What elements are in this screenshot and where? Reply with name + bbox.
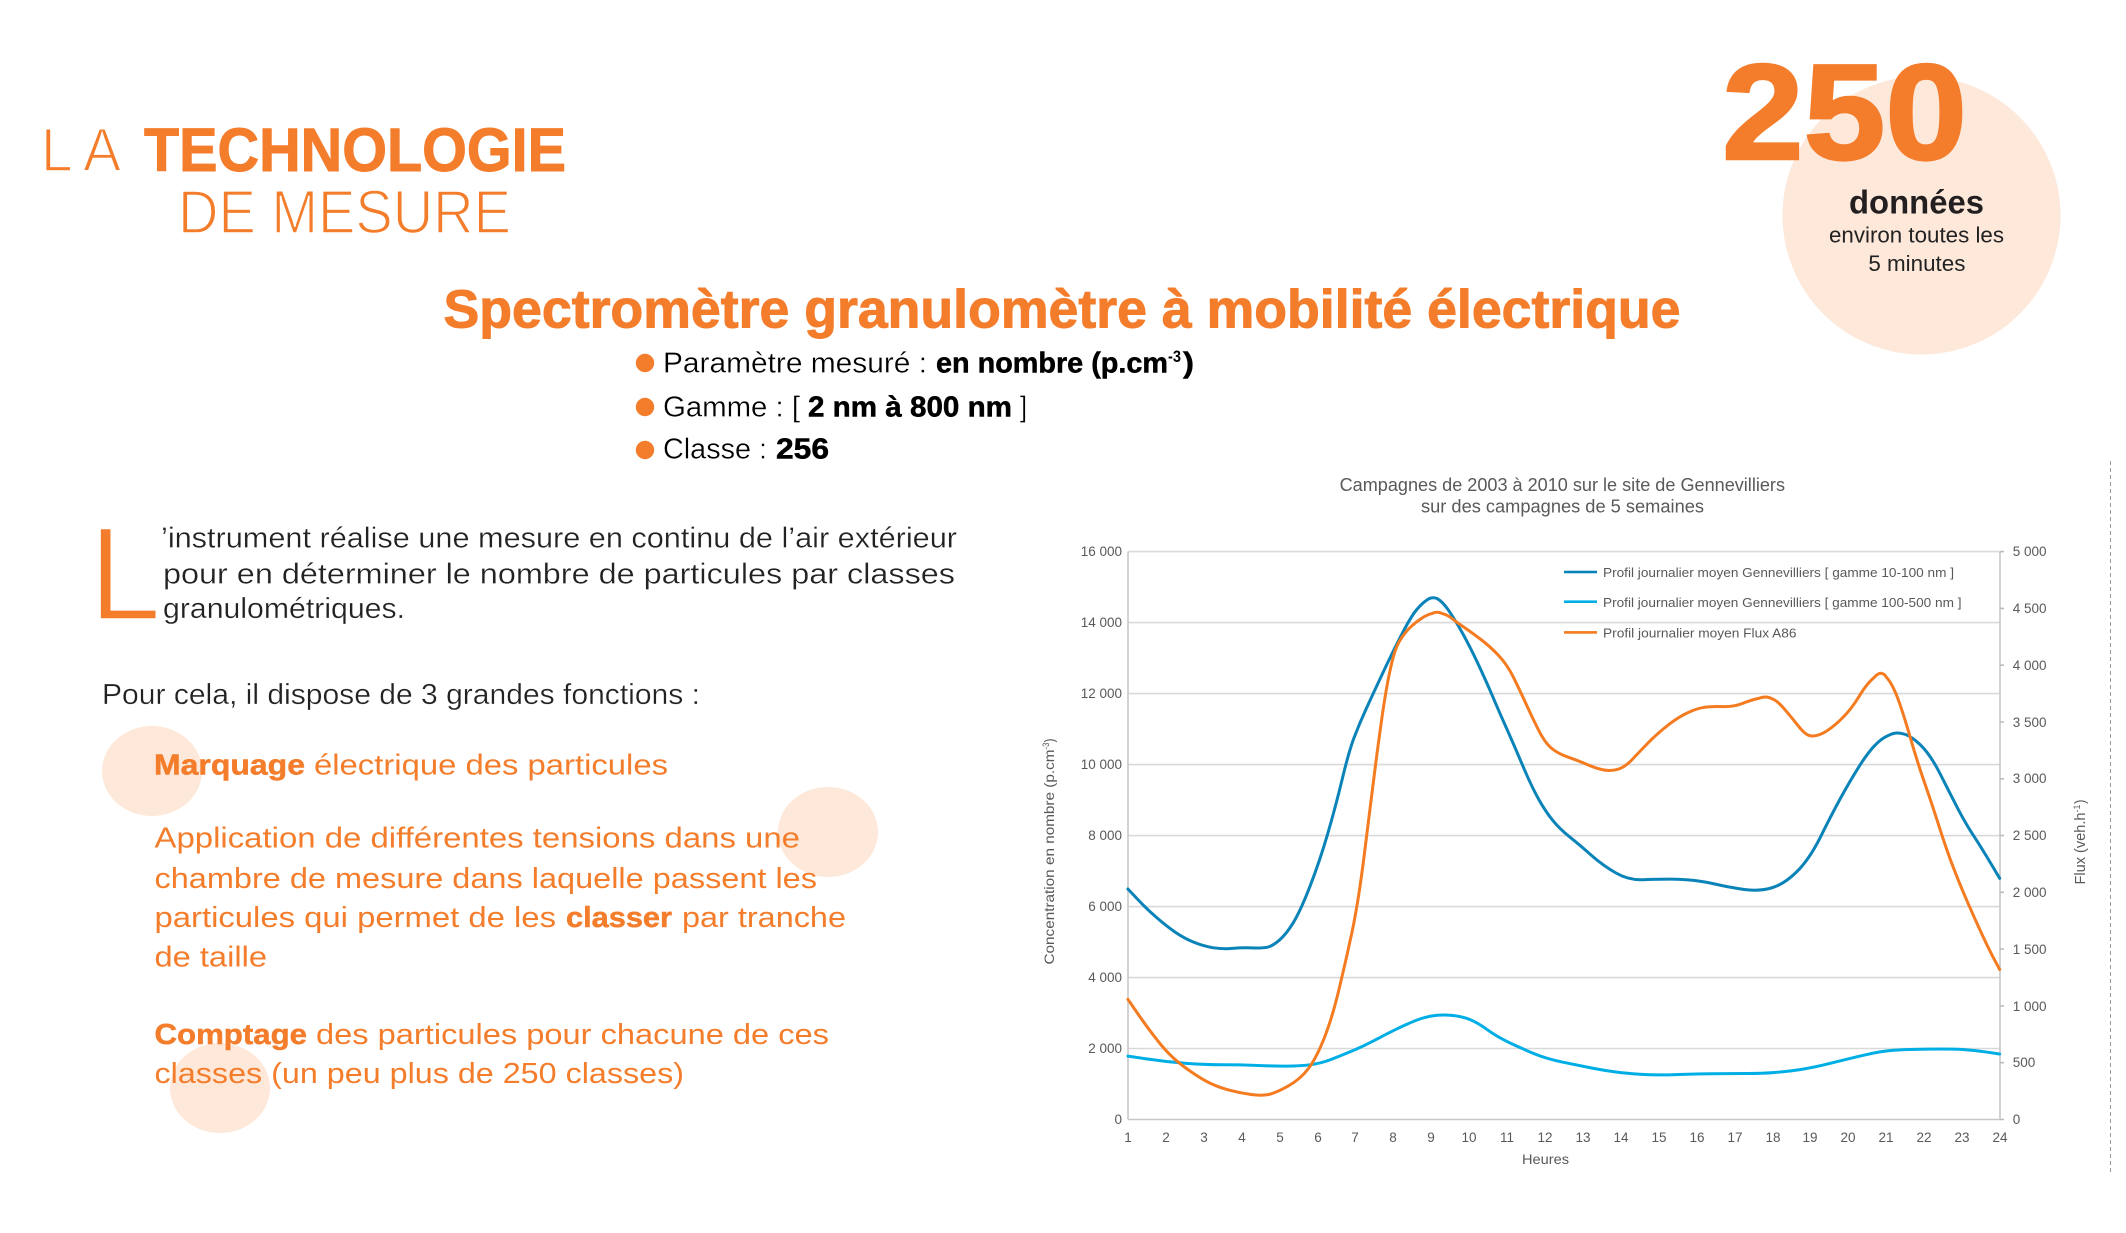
x axis labels: 7 [1351, 1130, 1359, 1145]
callout: 250 données [1722, 36, 2060, 354]
bullet: gamme: Gamme : [ [663, 391, 800, 423]
bullet: classe: Classe : [663, 434, 767, 466]
left axis title: -3 [1041, 742, 1051, 750]
x axis labels [1124, 1130, 2008, 1145]
right axis title: -1 [2072, 804, 2082, 812]
chart: daily profiles [1041, 475, 2089, 1167]
function: classement: chambre de mesure dans laquelle passent les [154, 863, 817, 895]
x axis labels: 5 [1276, 1130, 1284, 1145]
x axis labels: 9 [1427, 1130, 1435, 1145]
series: flux A86 [1128, 612, 2000, 1095]
left axis labels: 4 000 [1088, 970, 1122, 985]
legend [1564, 565, 1962, 640]
left axis labels: 0 [1114, 1112, 1122, 1127]
function: comptage: classes (un peu plus de 250 classes) [154, 1058, 684, 1090]
left axis labels [1081, 544, 1122, 1127]
right axis labels: 1 000 [2013, 999, 2046, 1014]
function: comptage [154, 1019, 829, 1090]
right axis labels: 3 000 [2013, 771, 2046, 786]
title: DE MESURE [178, 178, 511, 246]
x axis labels: 10 [1461, 1130, 1477, 1145]
bullet list: parameters [636, 347, 1194, 466]
intro paragraph: granulométriques. [163, 593, 405, 625]
big number: 250 [1722, 36, 1967, 188]
x axis labels: 24 [1992, 1130, 2008, 1145]
x axis labels: 17 [1727, 1130, 1743, 1145]
left axis title: ) [1041, 738, 1057, 742]
intro paragraph: ’instrument réalise une mesure en continu de l’air extérieur [161, 523, 957, 555]
x axis labels: 20 [1840, 1130, 1856, 1145]
x axis labels: 14 [1613, 1130, 1629, 1145]
legend: Profil journalier moyen Gennevilliers [ gamme 10-100 nm ] [1603, 565, 1954, 580]
x axis labels: 21 [1878, 1130, 1894, 1145]
left axis labels: 6 000 [1088, 899, 1122, 914]
chart title: sur des campagnes de 5 semaines [1421, 496, 1704, 516]
right axis labels: 1 500 [2013, 942, 2046, 957]
bullet: paramètre [636, 347, 1194, 380]
bullet: gamme [636, 391, 1027, 423]
function: classement: Application de différentes tensions dans une [154, 822, 800, 854]
function: classement: par tranche [682, 902, 846, 934]
function: classement: particules qui permet de les [154, 902, 556, 934]
left axis labels: 8 000 [1088, 828, 1122, 843]
bullet: gamme: 2 nm à 800 nm [808, 391, 1012, 423]
left axis title: Concentration en nombre (p.cm [1041, 749, 1057, 964]
x axis labels: 12 [1537, 1130, 1553, 1145]
title: L A [41, 116, 121, 184]
function: marquage: électrique des particules [314, 749, 668, 781]
callout detail line 1: environ toutes les [1829, 222, 2004, 247]
x axis labels: 22 [1916, 1130, 1932, 1145]
function: marquage [154, 749, 668, 781]
left axis labels: 10 000 [1081, 757, 1122, 772]
right axis title: ) [2072, 800, 2089, 804]
left axis labels: 2 000 [1088, 1041, 1122, 1056]
bullet: gamme: ] [1020, 391, 1027, 423]
x axis labels: 8 [1389, 1130, 1397, 1145]
x axis labels: 15 [1651, 1130, 1667, 1145]
intro paragraph [161, 523, 957, 625]
left axis labels: 14 000 [1081, 615, 1122, 630]
legend: Profil journalier moyen Flux A86 [1603, 626, 1796, 640]
x axis labels: 1 [1124, 1130, 1132, 1145]
title [41, 116, 566, 246]
callout detail line 2: 5 minutes [1868, 251, 1965, 276]
callout background circle [1782, 76, 2060, 354]
right axis labels: 500 [2013, 1055, 2035, 1070]
x axis labels: 2 [1162, 1130, 1170, 1145]
x axis labels: 6 [1314, 1130, 1322, 1145]
x axis labels: 13 [1575, 1130, 1591, 1145]
bullet: paramètre: ) [1183, 348, 1194, 380]
right axis labels: 4 000 [2013, 658, 2046, 673]
heading: instrument name: Spectromètre granulomètre à mobilité électrique [444, 279, 1680, 339]
title: TECHNOLOGIE [144, 116, 566, 184]
right axis labels: 3 500 [2013, 715, 2046, 730]
function: comptage: des particules pour chacune de ces [316, 1019, 829, 1051]
intro paragraph: pour en déterminer le nombre de particules par classes [163, 559, 955, 591]
drop cap L: L [89, 500, 161, 648]
bullet: classe [636, 434, 829, 466]
function: classement: classer [566, 902, 672, 934]
function: marquage: Marquage [154, 749, 305, 781]
series: gamme 100-500 nm [1128, 1015, 2000, 1075]
x axis labels: 19 [1802, 1130, 1818, 1145]
x axis title: Heures [1522, 1152, 1569, 1167]
function: classement [154, 822, 846, 973]
x axis labels: 11 [1500, 1130, 1514, 1145]
function: classement: de taille [154, 941, 267, 973]
decorative circle 3 [170, 1043, 270, 1133]
x axis labels: 16 [1689, 1130, 1705, 1145]
function: comptage: Comptage [154, 1019, 307, 1051]
right axis labels: 4 500 [2013, 601, 2046, 616]
right axis labels [2013, 544, 2046, 1127]
bullet: paramètre: en nombre (p.cm [936, 348, 1168, 380]
callout label: données [1849, 184, 1984, 220]
right axis labels: 2 000 [2013, 885, 2046, 900]
bullet: paramètre: Paramètre mesuré : [663, 348, 927, 380]
chart title [1340, 475, 1785, 516]
left axis labels: 16 000 [1081, 544, 1122, 559]
bullet: paramètre: -3 [1168, 347, 1181, 366]
x axis labels: 18 [1765, 1130, 1781, 1145]
bullet: classe: 256 [776, 434, 829, 466]
left axis labels: 12 000 [1081, 686, 1122, 701]
x axis labels: 4 [1238, 1130, 1246, 1145]
right axis title: Flux (veh.h [2072, 812, 2089, 884]
x axis labels: 3 [1200, 1130, 1208, 1145]
chart title: Campagnes de 2003 à 2010 sur le site de Gennevilliers [1340, 475, 1785, 495]
legend: Profil journalier moyen Gennevilliers [ gamme 100-500 nm ] [1603, 595, 1962, 610]
x axis labels: 23 [1954, 1130, 1970, 1145]
right axis labels: 5 000 [2013, 544, 2046, 559]
decorative circle 2 [778, 787, 878, 877]
right axis labels: 2 500 [2013, 828, 2046, 843]
right axis labels: 0 [2013, 1112, 2020, 1127]
series: gamme 10-100 nm [1128, 598, 2000, 949]
lead-in sentence: Pour cela, il dispose de 3 grandes fonctions : [102, 679, 700, 711]
decorative circle 1 [102, 726, 202, 816]
